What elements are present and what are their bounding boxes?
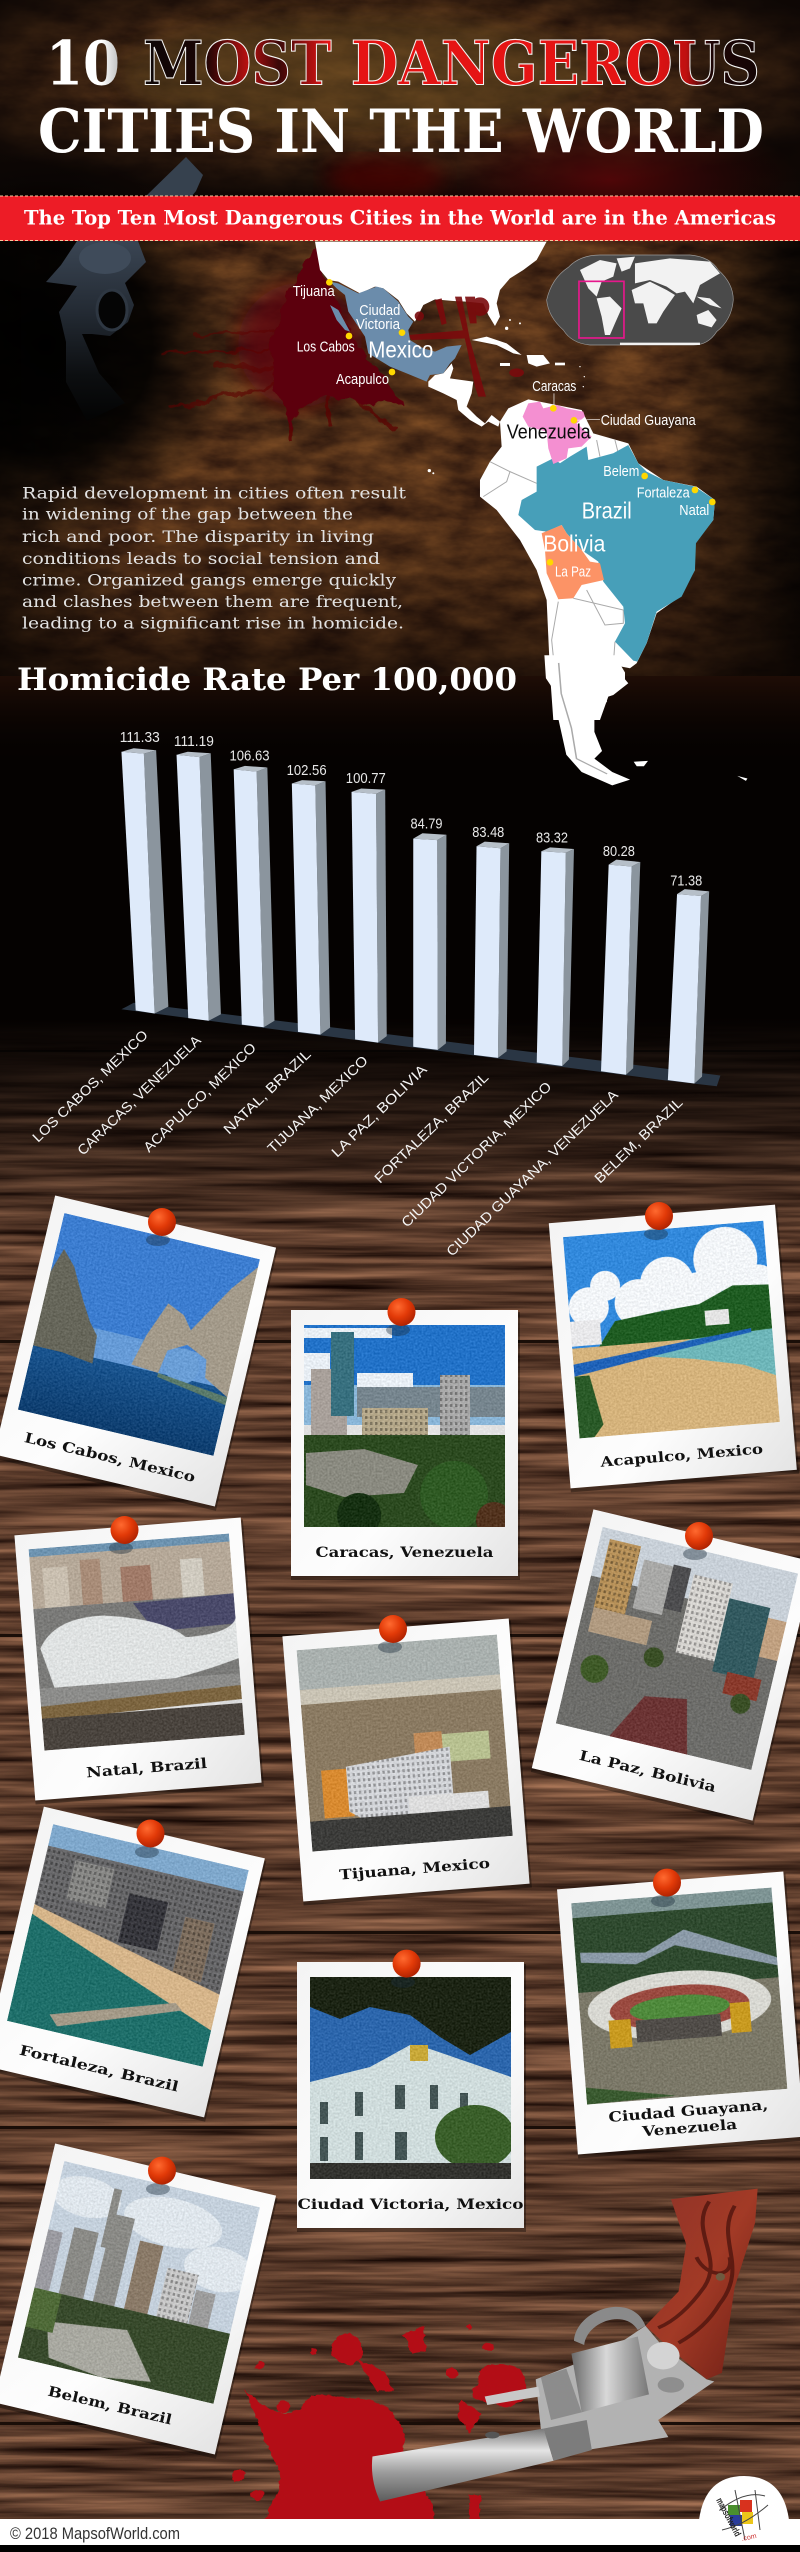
photo card: Caracas bbox=[291, 1310, 520, 1580]
map labels: Ciudad Guayana bbox=[601, 412, 696, 429]
central america bbox=[428, 363, 500, 427]
map labels: La Paz bbox=[555, 564, 591, 581]
blood splatter behind map bbox=[163, 243, 405, 440]
photo card: Ciudad Victoria: Ciudad Victoria, Mexico bbox=[298, 2197, 524, 2213]
logo: mapsofworld: mapsofworld bbox=[713, 2496, 743, 2539]
paragraph text: rich and poor. The disparity in living bbox=[22, 528, 374, 546]
map labels: Ciudad bbox=[359, 302, 400, 319]
map labels: Acapulco bbox=[336, 371, 389, 388]
revolver barrel bbox=[372, 2429, 554, 2501]
photo card: Acapulco bbox=[549, 1204, 799, 1492]
photo card: Fortaleza bbox=[0, 1807, 267, 2122]
logo: mapsofworld bbox=[699, 2476, 789, 2545]
bar values: 83.32 bbox=[536, 830, 568, 846]
bar values: 111.19 bbox=[174, 734, 214, 750]
bar category labels: CIUDAD GUAYANA, VENEZUELA bbox=[443, 1086, 621, 1259]
venezuela bbox=[523, 402, 592, 464]
chart bars bbox=[121, 748, 720, 1086]
paragraph text: Rapid development in cities often result bbox=[22, 485, 407, 503]
bar values bbox=[120, 730, 702, 889]
bar category labels: NATAL, BRAZIL bbox=[220, 1046, 314, 1137]
mexico bbox=[330, 282, 462, 382]
bar category labels: LOS CABOS, MEXICO bbox=[29, 1027, 151, 1145]
bar values: 71.38 bbox=[670, 873, 702, 889]
brazil bbox=[518, 445, 715, 662]
blood splatter on wood bbox=[231, 2324, 526, 2525]
red banner bbox=[0, 196, 800, 241]
paragraph text: leading to a significant rise in homicide. bbox=[22, 614, 404, 632]
title line 1 number: 10 bbox=[46, 28, 120, 100]
bar category labels: FORTALEZA, BRAZIL bbox=[371, 1069, 492, 1186]
chart heading: Homicide Rate Per 100,000 bbox=[17, 662, 517, 698]
label leader lines bbox=[554, 393, 600, 420]
photo card: La Paz bbox=[531, 1509, 800, 1825]
bar category labels: ACAPULCO, MEXICO bbox=[140, 1039, 259, 1155]
photo card: Belem: Belem, Brazil bbox=[46, 2384, 173, 2428]
bar values: 111.33 bbox=[120, 730, 160, 746]
revolver cylinder bbox=[571, 2336, 649, 2412]
photo card: Caracas: Caracas, Venezuela bbox=[316, 1545, 494, 1561]
south america landmass bbox=[480, 399, 715, 720]
bar values: 102.56 bbox=[287, 763, 327, 779]
map labels: Mexico bbox=[368, 337, 433, 363]
bar values: 84.79 bbox=[410, 817, 442, 833]
photo card: Tijuana bbox=[282, 1618, 532, 1905]
footer strip bbox=[0, 2519, 800, 2552]
north america bbox=[315, 242, 547, 326]
map labels bbox=[293, 283, 709, 581]
bar category labels: CIUDAD VICTORIA, MEXICO bbox=[398, 1078, 554, 1230]
banner text: The Top Ten Most Dangerous Cities in the World are in the Americas bbox=[24, 206, 776, 230]
paragraph text: in widening of the gap between the bbox=[22, 506, 353, 524]
bar category labels: TIJUANA, MEXICO bbox=[264, 1052, 371, 1156]
border lines bbox=[483, 440, 623, 707]
photo card: Tijuana: Tijuana, Mexico bbox=[339, 1856, 491, 1884]
caribbean islands bbox=[428, 319, 585, 474]
icon: silver revolver with wooden grip bbox=[372, 2189, 758, 2501]
map labels: Brazil bbox=[582, 497, 632, 523]
map labels: Victoria bbox=[356, 316, 401, 333]
photo card: Fortaleza: Fortaleza, Brazil bbox=[18, 2043, 180, 2095]
map labels: Natal bbox=[679, 502, 709, 519]
bar category labels bbox=[29, 1027, 686, 1259]
copyright text: © 2018 MapsofWorld.com bbox=[10, 2524, 180, 2543]
icon: dark revolver behind banner bbox=[46, 157, 203, 421]
bolivia bbox=[542, 525, 604, 599]
map labels: Tijuana bbox=[293, 283, 335, 300]
photo card: Ciudad Victoria bbox=[297, 1962, 526, 2232]
map labels: Fortaleza bbox=[637, 484, 690, 501]
paragraph text: and clashes between them are frequent, bbox=[22, 593, 403, 611]
world locator inset bbox=[547, 255, 733, 345]
paragraph text: crime. Organized gangs emerge quickly bbox=[22, 572, 396, 590]
photo card: Acapulco: Acapulco, Mexico bbox=[599, 1441, 764, 1471]
map labels: Belem bbox=[603, 463, 639, 480]
map labels: Los Cabos bbox=[297, 339, 355, 356]
bar category labels: CARACAS, VENEZUELA bbox=[74, 1032, 204, 1158]
title: 10 most dangerous cities in the world bbox=[38, 28, 764, 167]
city dots bbox=[326, 279, 716, 566]
photo card: La Paz: La Paz, Bolivia bbox=[578, 1748, 717, 1796]
photo card: Natal: Natal, Brazil bbox=[86, 1756, 208, 1781]
photo card: Ciudad Guayana: Ciudad Guayana, bbox=[608, 2097, 769, 2126]
paragraph text bbox=[22, 485, 407, 632]
revolver grip bbox=[645, 2189, 758, 2379]
photo card: Natal bbox=[14, 1517, 264, 1804]
red push pins bbox=[109, 1202, 713, 2195]
photo card: Belem bbox=[0, 2143, 278, 2459]
bar values: 83.48 bbox=[472, 825, 504, 841]
photo card: Los Cabos: Los Cabos, Mexico bbox=[23, 1430, 197, 1486]
southern cone of south america bbox=[544, 655, 747, 785]
photo card: Ciudad Guayana bbox=[557, 1871, 800, 2158]
photo card: Los Cabos bbox=[0, 1195, 278, 1511]
map: the Americas bbox=[315, 242, 733, 720]
revolver frame bbox=[536, 2326, 714, 2459]
logo: mapsofworld: .com bbox=[741, 2533, 757, 2543]
blood drips over gulf bbox=[408, 297, 524, 397]
bar chart: homicide rate bbox=[29, 730, 720, 1259]
map labels: Caracas bbox=[532, 378, 576, 395]
bar category labels: LA PAZ, BOLIVIA bbox=[328, 1061, 430, 1160]
bar values: 100.77 bbox=[346, 771, 386, 787]
map labels: Venezuela bbox=[507, 421, 591, 443]
paragraph text: conditions leads to social tension and bbox=[22, 550, 380, 568]
bar category labels: BELEM, BRAZIL bbox=[591, 1094, 686, 1186]
photo card: Ciudad Guayana: Venezuela bbox=[641, 2117, 738, 2140]
bar values: 80.28 bbox=[603, 844, 635, 860]
map labels: Bolivia bbox=[543, 531, 605, 557]
bar values: 106.63 bbox=[230, 748, 270, 764]
